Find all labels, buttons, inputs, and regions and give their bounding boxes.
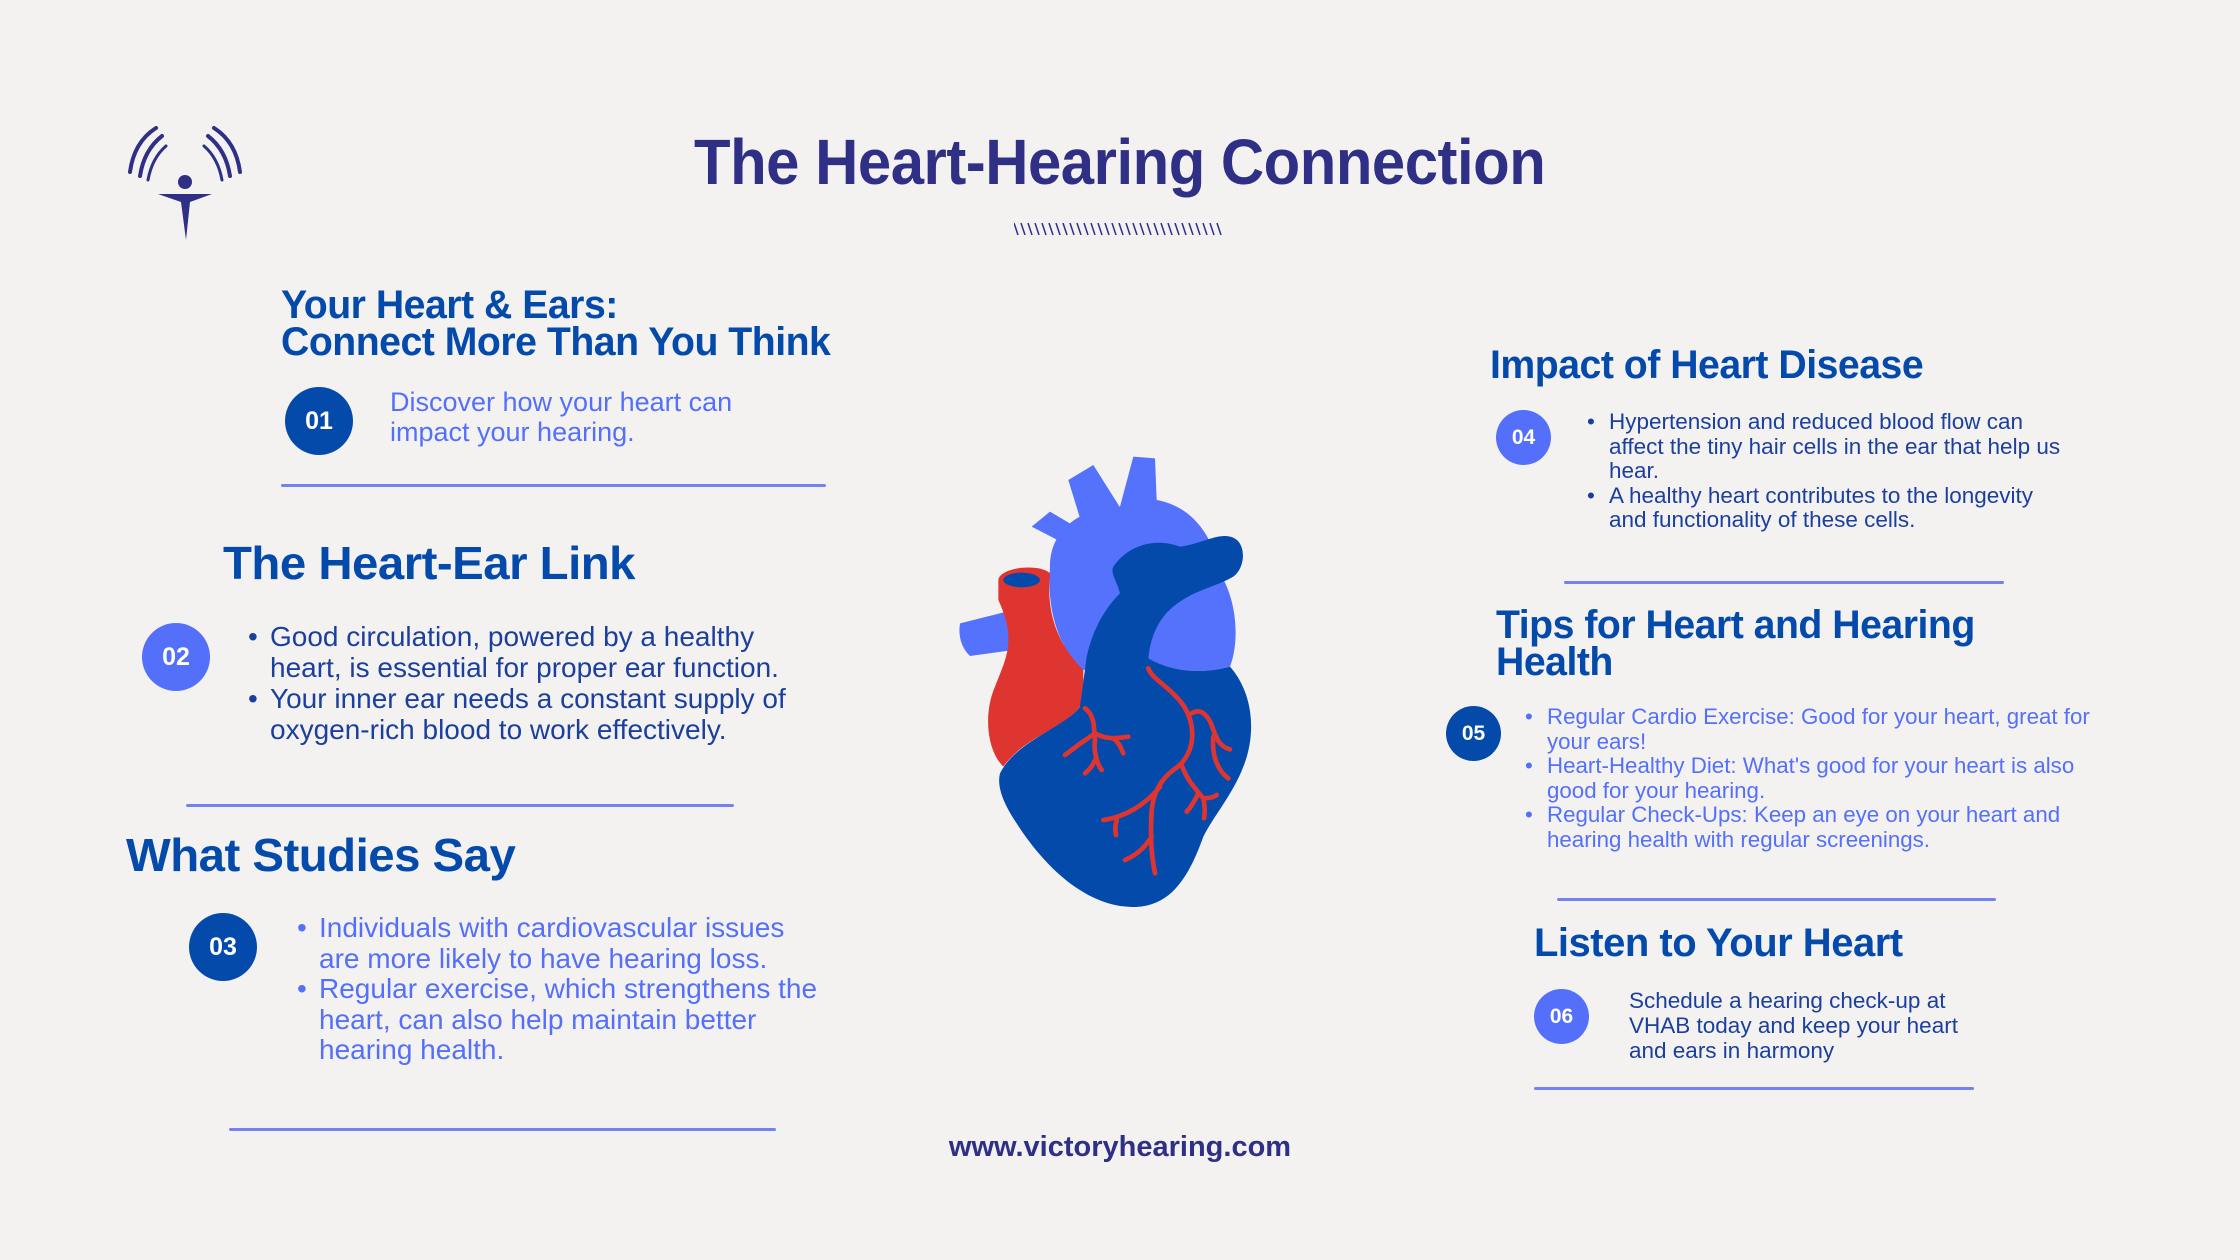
website url: www.victoryhearing.com: [949, 1131, 1291, 1163]
bullets 04: hear.: [1609, 458, 1659, 483]
bullets 04: affect the tiny hair cells in the ear that help us: [1609, 434, 2060, 458]
bullets 03: [298, 912, 817, 1065]
circle 02: 02: [162, 642, 190, 670]
text 06: [1629, 988, 1958, 1063]
section 5 heading: Tips for Heart and Hearing: [1496, 603, 1975, 647]
circle 01: [285, 387, 353, 455]
section 5 heading: [1496, 603, 1975, 684]
bullets 03: Regular exercise, which strengthens the: [319, 973, 817, 1004]
bullets 04: Hypertension and reduced blood flow can: [1609, 409, 2023, 434]
text 06: Schedule a hearing check-up at: [1629, 988, 1945, 1013]
logo: [128, 126, 242, 240]
bullets 02: heart, is essential for proper ear function.: [270, 652, 779, 683]
bullets 05: [1526, 704, 2090, 852]
text 06: VHAB today and keep your heart: [1629, 1013, 1958, 1038]
bullets 02: Good circulation, powered by a healthy: [270, 621, 754, 652]
section 6 heading: Listen to Your Heart: [1534, 921, 1903, 965]
bullets 05: hearing health with regular screenings.: [1547, 827, 1930, 852]
bullets 05: your ears!: [1547, 729, 1646, 754]
section 3 heading: What Studies Say: [126, 829, 515, 881]
circle 04: 04: [1512, 426, 1535, 448]
text 01: Discover how your heart can: [390, 387, 732, 417]
circle 01: 01: [305, 406, 333, 434]
bullets 04: [1588, 409, 2060, 532]
bullets 05: good for your hearing.: [1547, 778, 1765, 803]
circle 03: [189, 913, 257, 981]
bullets 02: [249, 621, 786, 745]
section 1 heading: [281, 283, 831, 364]
bullets 04: and functionality of these cells.: [1609, 507, 1915, 532]
circle 04: [1496, 410, 1551, 465]
bullets 03: hearing health.: [319, 1034, 504, 1065]
circle 05: 05: [1462, 722, 1485, 744]
bullets 04: A healthy heart contributes to the longevity: [1609, 482, 2033, 508]
section 5 heading: Health: [1496, 640, 1613, 684]
section 4 heading: Impact of Heart Disease: [1490, 343, 1923, 387]
bullets 05: Regular Check-Ups: Keep an eye on your heart and: [1547, 802, 2060, 827]
circle 06: [1534, 989, 1589, 1044]
bullets 03: heart, can also help maintain better: [319, 1004, 756, 1034]
bullets 02: Your inner ear needs a constant supply of: [270, 683, 786, 714]
circle 02: [142, 623, 210, 691]
text 01: impact your hearing.: [390, 417, 635, 447]
bullets 02: oxygen-rich blood to work effectively.: [270, 714, 727, 745]
bullets 05: Regular Cardio Exercise: Good for your heart, great for: [1547, 704, 2090, 729]
title: The Heart-Hearing Connection: [694, 126, 1545, 198]
bullets 03: Individuals with cardiovascular issues: [319, 912, 784, 943]
heart illustration: [959, 456, 1252, 907]
circle 03: 03: [209, 932, 237, 960]
section 2 heading: The Heart-Ear Link: [223, 537, 635, 589]
text 06: and ears in harmony: [1629, 1038, 1834, 1063]
section 1 heading: Connect More Than You Think: [281, 320, 830, 364]
title hatch decoration: [1014, 223, 1222, 235]
bullets 05: Heart-Healthy Diet: What's good for your heart is also: [1547, 753, 2074, 778]
section 1 heading: Your Heart & Ears:: [281, 283, 618, 327]
circle 05: [1446, 706, 1501, 761]
circle 06: 06: [1550, 1004, 1573, 1028]
bullets 03: are more likely to have hearing loss.: [319, 942, 767, 974]
text 01: [390, 387, 732, 447]
